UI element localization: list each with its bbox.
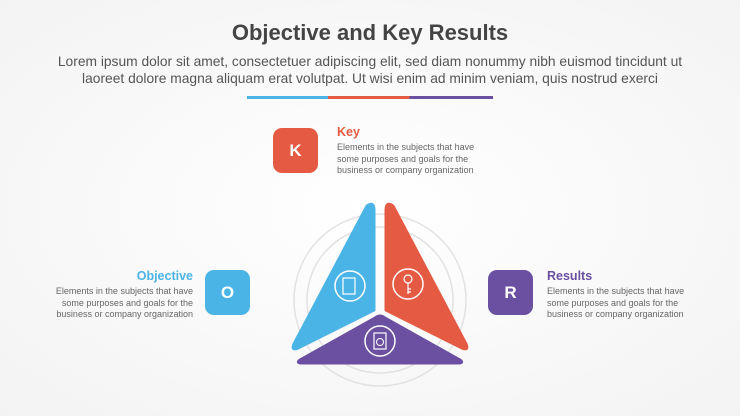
title: Objective and Key Results [232, 20, 508, 45]
segment purple [298, 316, 462, 363]
text Results: Elements in the subjects that have some purposes and goals for the business or company organization [547, 286, 684, 319]
text Key: Elements in the subjects that have some purposes and goals for the business or company organization [337, 142, 474, 175]
text Key [337, 125, 474, 175]
box K: K [289, 140, 302, 160]
text Key: Key [337, 125, 360, 139]
box O [205, 270, 250, 315]
box R: R [504, 282, 517, 302]
segment blue [293, 204, 374, 349]
text Objective [56, 269, 193, 319]
subtitle: Lorem ipsum dolor sit amet, consectetuer adipiscing elit, sed diam nonummy nibh euismod tincidunt ut laoreet dolore magna aliquam erat volutpat. Ut wisi enim ad minim veniam, quis nostrud exerci [58, 54, 682, 86]
text Objective: Objective [137, 269, 193, 283]
box K [273, 128, 318, 173]
box R [488, 270, 533, 315]
box O: O [221, 282, 234, 302]
text Objective: Elements in the subjects that have some purposes and goals for the business or company organization [56, 286, 193, 319]
text Results: Results [547, 269, 592, 283]
segment red [386, 204, 467, 349]
color divider [247, 96, 493, 99]
text Results [547, 269, 684, 319]
